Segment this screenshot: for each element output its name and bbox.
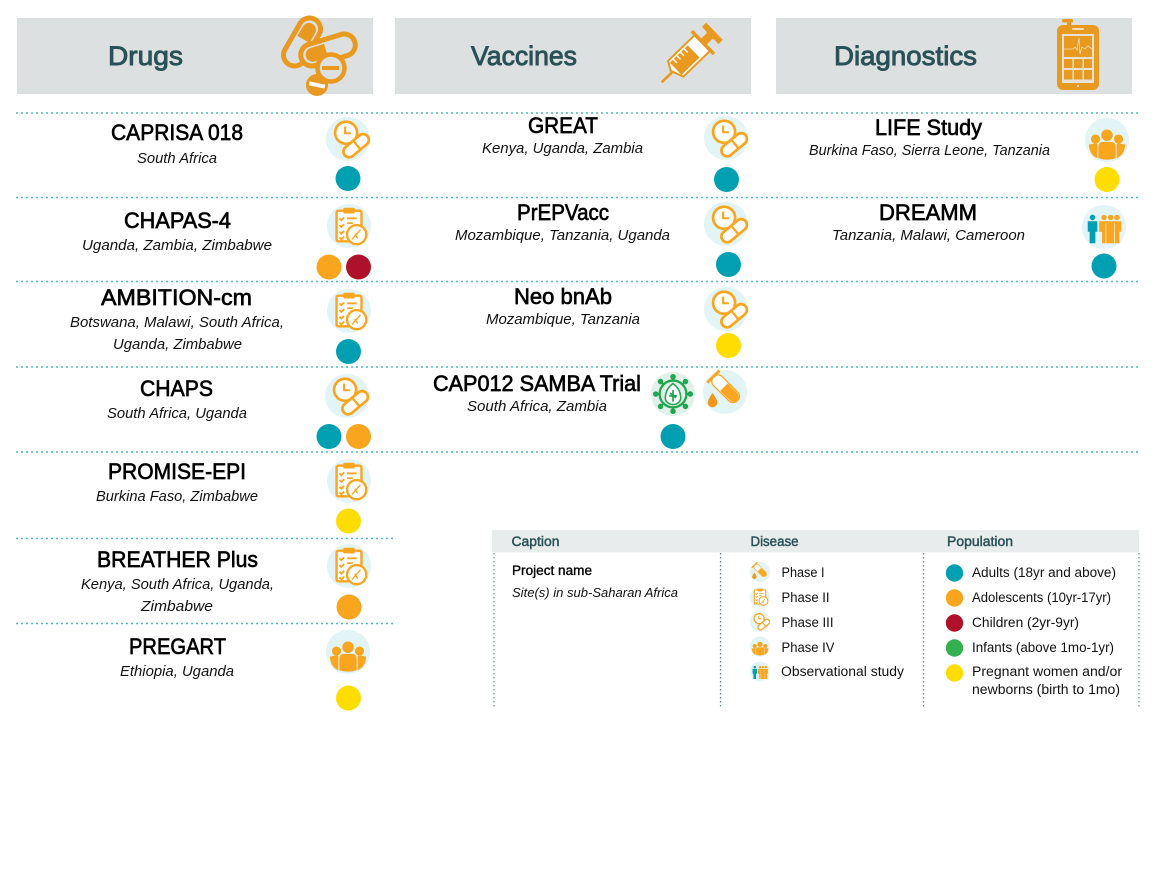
- legend: disease: [750, 534, 904, 682]
- legend: population: Adolescents (10yr-17yr): [972, 590, 1111, 605]
- project: PROMISE-EPI: [96, 459, 371, 534]
- project: CAPRISA 018: [111, 117, 371, 191]
- legend: disease: Observational study: [781, 664, 904, 679]
- project: CHAPAS-4: Uganda, Zambia, Zimbabwe: [82, 237, 272, 254]
- project: AMBITION-cm: [70, 285, 371, 364]
- icon: pills: [279, 14, 358, 96]
- project: DREAMM: [832, 200, 1126, 278]
- legend: caption: [512, 534, 678, 600]
- project: PREGART: PREGART: [129, 634, 226, 659]
- legend: disease: Phase III: [782, 615, 834, 630]
- project: GREAT: GREAT: [528, 113, 598, 138]
- project: CHAPAS-4: [82, 204, 371, 280]
- project: CHAPS: CHAPS: [140, 376, 213, 401]
- project: Neo bnAb: Neo bnAb: [514, 284, 612, 309]
- project: LIFE Study: Burkina Faso, Sierra Leone, Tanzania: [809, 142, 1050, 159]
- project: BREATHER Plus: Kenya, South Africa, Uganda,: [81, 576, 274, 593]
- project: AMBITION-cm: Botswana, Malawi, South Africa,: [70, 314, 284, 331]
- project: Neo bnAb: [486, 284, 749, 358]
- project: GREAT: Kenya, Uganda, Zambia: [482, 140, 643, 157]
- project: CAP012 SAMBA Trial: South Africa, Zambia: [467, 398, 607, 415]
- project: AMBITION-cm: Uganda, Zimbabwe: [113, 336, 242, 353]
- project: DREAMM: Tanzania, Malawi, Cameroon: [832, 227, 1025, 244]
- legend: caption: Project name: [512, 563, 592, 578]
- project: DREAMM: DREAMM: [879, 200, 977, 225]
- header: Drugs: [17, 14, 373, 96]
- legend: disease: Disease: [750, 534, 798, 549]
- icon: tablet: [1057, 19, 1099, 90]
- project: PREGART: [120, 630, 370, 710]
- project: BREATHER Plus: BREATHER Plus: [97, 547, 258, 572]
- legend panel: [492, 530, 1139, 707]
- legend: population: Population: [947, 534, 1013, 549]
- project: CHAPS: [107, 374, 371, 449]
- project: PrEPVacc: [455, 200, 749, 277]
- project: AMBITION-cm: AMBITION-cm: [101, 285, 252, 310]
- header: Diagnostics: [776, 18, 1132, 94]
- header: Diagnostics: Diagnostics: [834, 41, 977, 71]
- legend: population: [946, 534, 1123, 697]
- project: CAPRISA 018: CAPRISA 018: [111, 120, 243, 145]
- legend: caption: Site(s) in sub-Saharan Africa: [512, 585, 678, 600]
- legend: disease: Phase II: [782, 590, 830, 605]
- header: Drugs: Drugs: [108, 41, 183, 71]
- project: LIFE Study: LIFE Study: [875, 115, 982, 140]
- legend: population: Adults (18yr and above): [972, 565, 1116, 580]
- legend: caption: Caption: [512, 534, 560, 549]
- project: BREATHER Plus: [81, 544, 371, 620]
- project: Neo bnAb: Mozambique, Tanzania: [486, 311, 640, 328]
- legend: population: Children (2yr-9yr): [972, 615, 1079, 630]
- project: PrEPVacc: PrEPVacc: [517, 200, 609, 225]
- header: Vaccines: Vaccines: [471, 41, 577, 71]
- legend: disease: Phase I: [782, 565, 824, 580]
- project: CAPRISA 018: South Africa: [137, 150, 217, 167]
- header: Vaccines: [395, 18, 751, 94]
- project: CAP012 SAMBA Trial: CAP012 SAMBA Trial: [433, 371, 641, 396]
- icon: syringe: [651, 20, 726, 94]
- project: GREAT: [482, 113, 749, 192]
- project: LIFE Study: [809, 115, 1129, 192]
- project: CAP012 SAMBA Trial: [433, 369, 747, 449]
- project: BREATHER Plus: Zimbabwe: [140, 598, 213, 615]
- project: CHAPS: South Africa, Uganda: [107, 405, 247, 422]
- legend: population: newborns (birth to 1mo): [972, 682, 1120, 697]
- legend: disease: Phase IV: [782, 640, 834, 655]
- project: PROMISE-EPI: Burkina Faso, Zimbabwe: [96, 488, 258, 505]
- project: CHAPAS-4: CHAPAS-4: [124, 208, 231, 233]
- project: PROMISE-EPI: PROMISE-EPI: [108, 459, 246, 484]
- project: PREGART: Ethiopia, Uganda: [120, 663, 234, 680]
- legend: population: Infants (above 1mo-1yr): [972, 640, 1114, 655]
- project: PrEPVacc: Mozambique, Tanzania, Uganda: [455, 227, 670, 244]
- legend: population: Pregnant women and/or: [972, 664, 1123, 679]
